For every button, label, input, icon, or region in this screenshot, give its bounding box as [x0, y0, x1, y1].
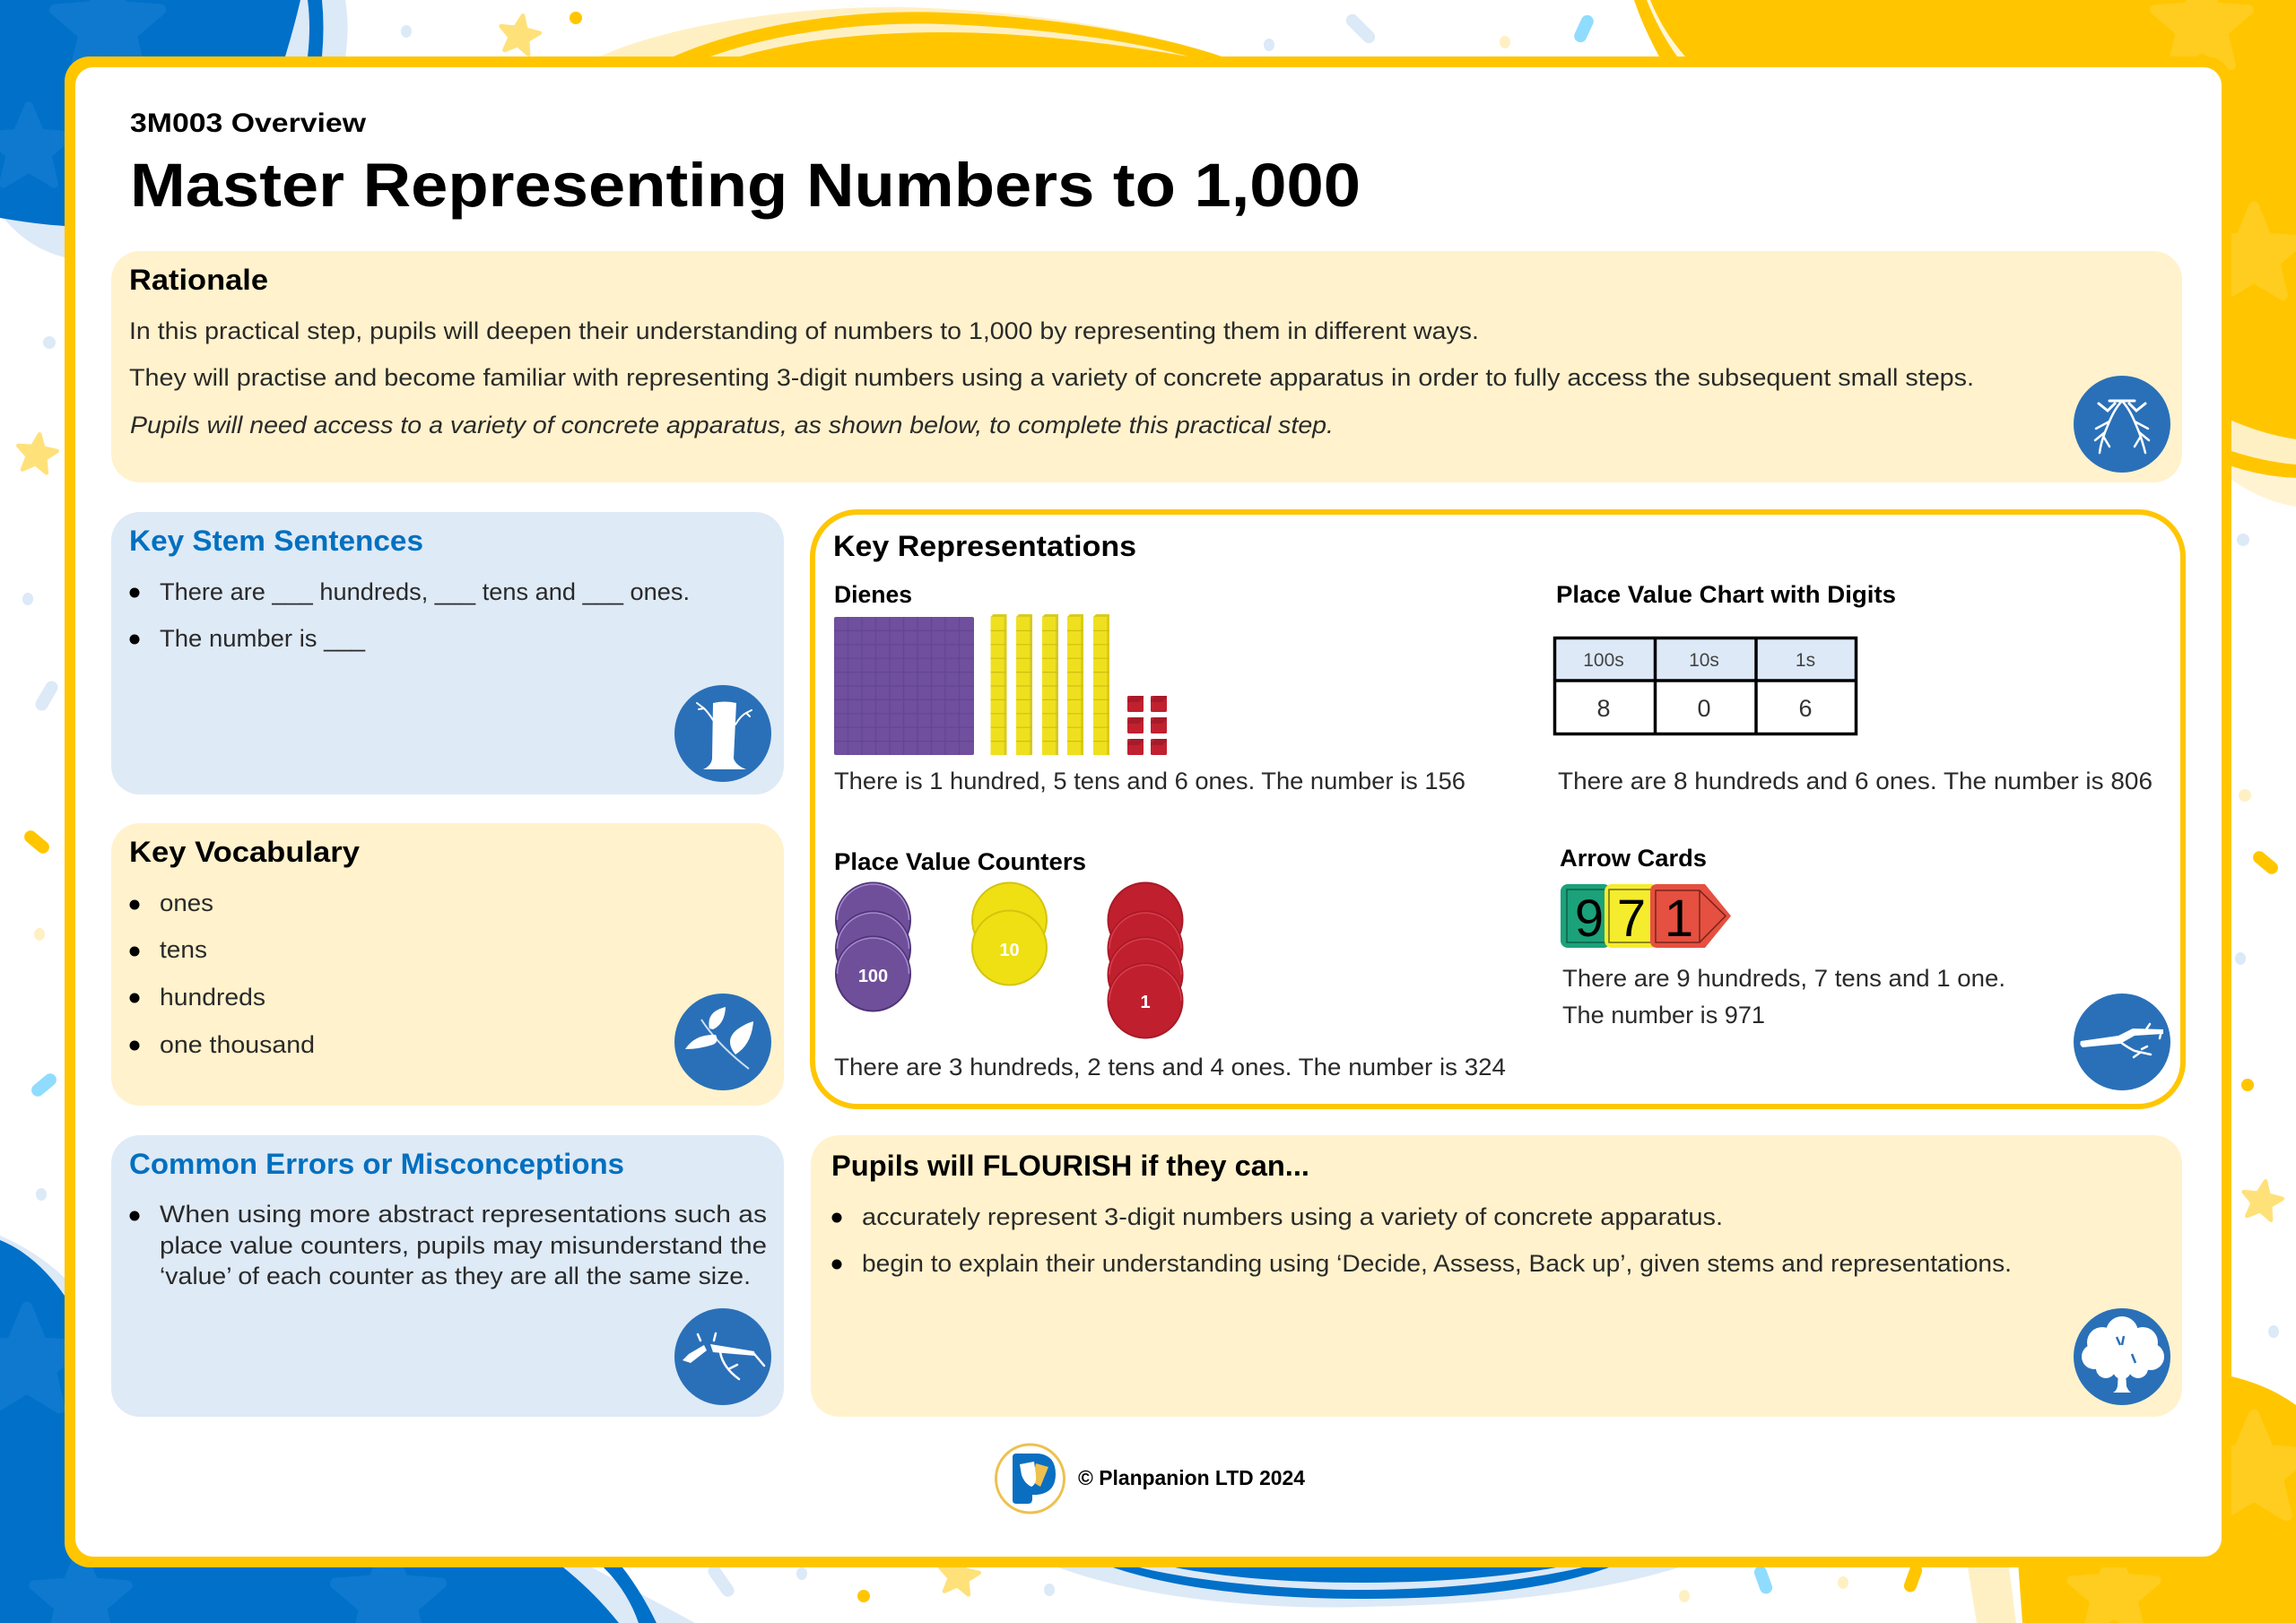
sub-panel: arrow cards — [1560, 845, 2005, 1028]
heading: key stem sentences: Key Stem Sentences — [129, 525, 423, 557]
list item: tens — [129, 936, 207, 963]
heading: flourish: Pupils will FLOURISH if they can... — [831, 1150, 1309, 1182]
list item: hundreds: hundreds — [160, 984, 265, 1011]
yellow 10 counters — [972, 882, 1047, 985]
arrow cards 971: 7 — [1617, 890, 1646, 948]
panel: flourish — [811, 1135, 2182, 1417]
background: top-left blue wave — [0, 0, 348, 257]
heading: place value chart: Place Value Chart with Digits — [1556, 581, 1896, 608]
heading: key representations: Key Representations — [833, 530, 1136, 562]
background: bottom-left blue wave — [0, 1236, 695, 1623]
arrow cards 971 — [1561, 884, 1731, 948]
place value table: 1s — [1796, 650, 1815, 671]
place value table: 8 — [1596, 695, 1611, 722]
list item: one thousand: one thousand — [160, 1031, 315, 1058]
list item: tens: tens — [160, 936, 207, 963]
heading: key vocabulary: Key Vocabulary — [129, 836, 360, 868]
title: Master Representing Numbers to 1,000 — [130, 151, 1361, 220]
icon: branch — [2074, 994, 2170, 1090]
footer — [996, 1445, 1305, 1513]
dienes tens rods — [990, 614, 1109, 755]
caption: counters: There are 3 hundreds, 2 tens and 4 ones. The number is 324 — [834, 1054, 1506, 1081]
caption: place value chart: There are 8 hundreds and 6 ones. The number is 806 — [1558, 768, 2152, 794]
heading: common errors: Common Errors or Misconceptions — [129, 1148, 624, 1180]
dienes hundred square — [834, 617, 974, 755]
panel: key stem sentences — [111, 512, 784, 794]
icon: tree stump — [674, 685, 771, 782]
background: top-centre yellow arc — [600, 7, 1222, 56]
place value table: 0 — [1697, 695, 1711, 722]
bullet: misconception text — [129, 1201, 767, 1289]
background: bottom-centre blue arc — [1058, 1567, 1679, 1607]
icon: broken branch — [674, 1308, 771, 1405]
background: top-right yellow wave — [1634, 0, 2296, 507]
caption: arrow cards: There are 9 hundreds, 7 tens and 1 one. — [1562, 965, 2005, 992]
sub-panel: place value chart — [1555, 581, 2152, 794]
bullet: begin to explain: begin to explain their understanding using ‘Decide, Assess, Back up’, given stems and representations. — [862, 1250, 2012, 1277]
caption: arrow cards: The number is 971 — [1562, 1002, 1765, 1028]
copyright: © Planpanion LTD 2024 — [1078, 1466, 1305, 1489]
panel: rationale — [111, 251, 2182, 482]
icon: tree — [2074, 1308, 2170, 1405]
heading: place value counters: Place Value Counters — [834, 848, 1086, 875]
bullet: misconception text: place value counters, pupils may misunderstand the — [160, 1232, 767, 1259]
sub-panel: dienes — [834, 581, 1465, 794]
bullet: misconception text: ‘value’ of each counter as they are all the same size. — [160, 1263, 751, 1289]
text: rationale line 1: In this practical step, pupils will deepen their understanding of numbers to 1,000 by representing them in different ways. — [129, 317, 1479, 344]
bullet 2: The number is ___ — [160, 625, 366, 652]
text: rationale line 2: They will practise and become familiar with representing 3-digit numbers using a variety of concrete apparatus in order to fully access the subsequent small steps. — [129, 364, 1974, 391]
logo: Planpanion — [996, 1445, 1064, 1513]
place value table — [1555, 638, 1857, 733]
subtitle: 3M003 Overview — [130, 108, 367, 138]
sub-panel: place value counters — [834, 848, 1506, 1081]
icon: roots — [2074, 376, 2170, 473]
place value table: 100s — [1583, 650, 1624, 671]
heading: arrow cards: Arrow Cards — [1560, 845, 1707, 872]
bullet 1: There are ___ hundreds, ___ tens and ___ ones. — [160, 578, 690, 605]
caption: dienes: There is 1 hundred, 5 tens and 6 ones. The number is 156 — [834, 768, 1465, 794]
red 1 counters — [1109, 882, 1182, 1038]
bullet: misconception text: When using more abstract representations such as — [160, 1201, 767, 1228]
list item: ones — [129, 890, 213, 916]
dienes ones cubes — [1127, 696, 1167, 755]
place value table: 6 — [1798, 695, 1813, 722]
icon: leaves — [674, 994, 771, 1090]
background: bottom-right yellow wave — [1968, 1376, 2296, 1623]
list item: ones: ones — [160, 890, 213, 916]
panel: common errors or misconceptions — [111, 1135, 784, 1417]
purple 100 counters — [836, 882, 910, 1011]
panel: key vocabulary — [111, 823, 784, 1106]
arrow cards 971: 9 — [1575, 890, 1604, 948]
heading: rationale: Rationale — [129, 264, 268, 296]
yellow 10 counters: 10 — [999, 941, 1020, 960]
red 1 counters: 1 — [1140, 993, 1151, 1012]
caption: arrow cards — [1562, 965, 2005, 1028]
bullet: accurately represent: accurately represent 3-digit numbers using a variety of concrete apparatus. — [862, 1203, 1723, 1230]
panel: key representations — [813, 512, 2183, 1107]
place value table: 10s — [1689, 650, 1719, 671]
text: rationale note: Pupils will need access to a variety of concrete apparatus, as shown below, to complete this practical step. — [130, 412, 1334, 438]
heading: dienes: Dienes — [834, 581, 912, 608]
purple 100 counters: 100 — [858, 967, 888, 986]
arrow cards 971: 1 — [1665, 890, 1693, 948]
